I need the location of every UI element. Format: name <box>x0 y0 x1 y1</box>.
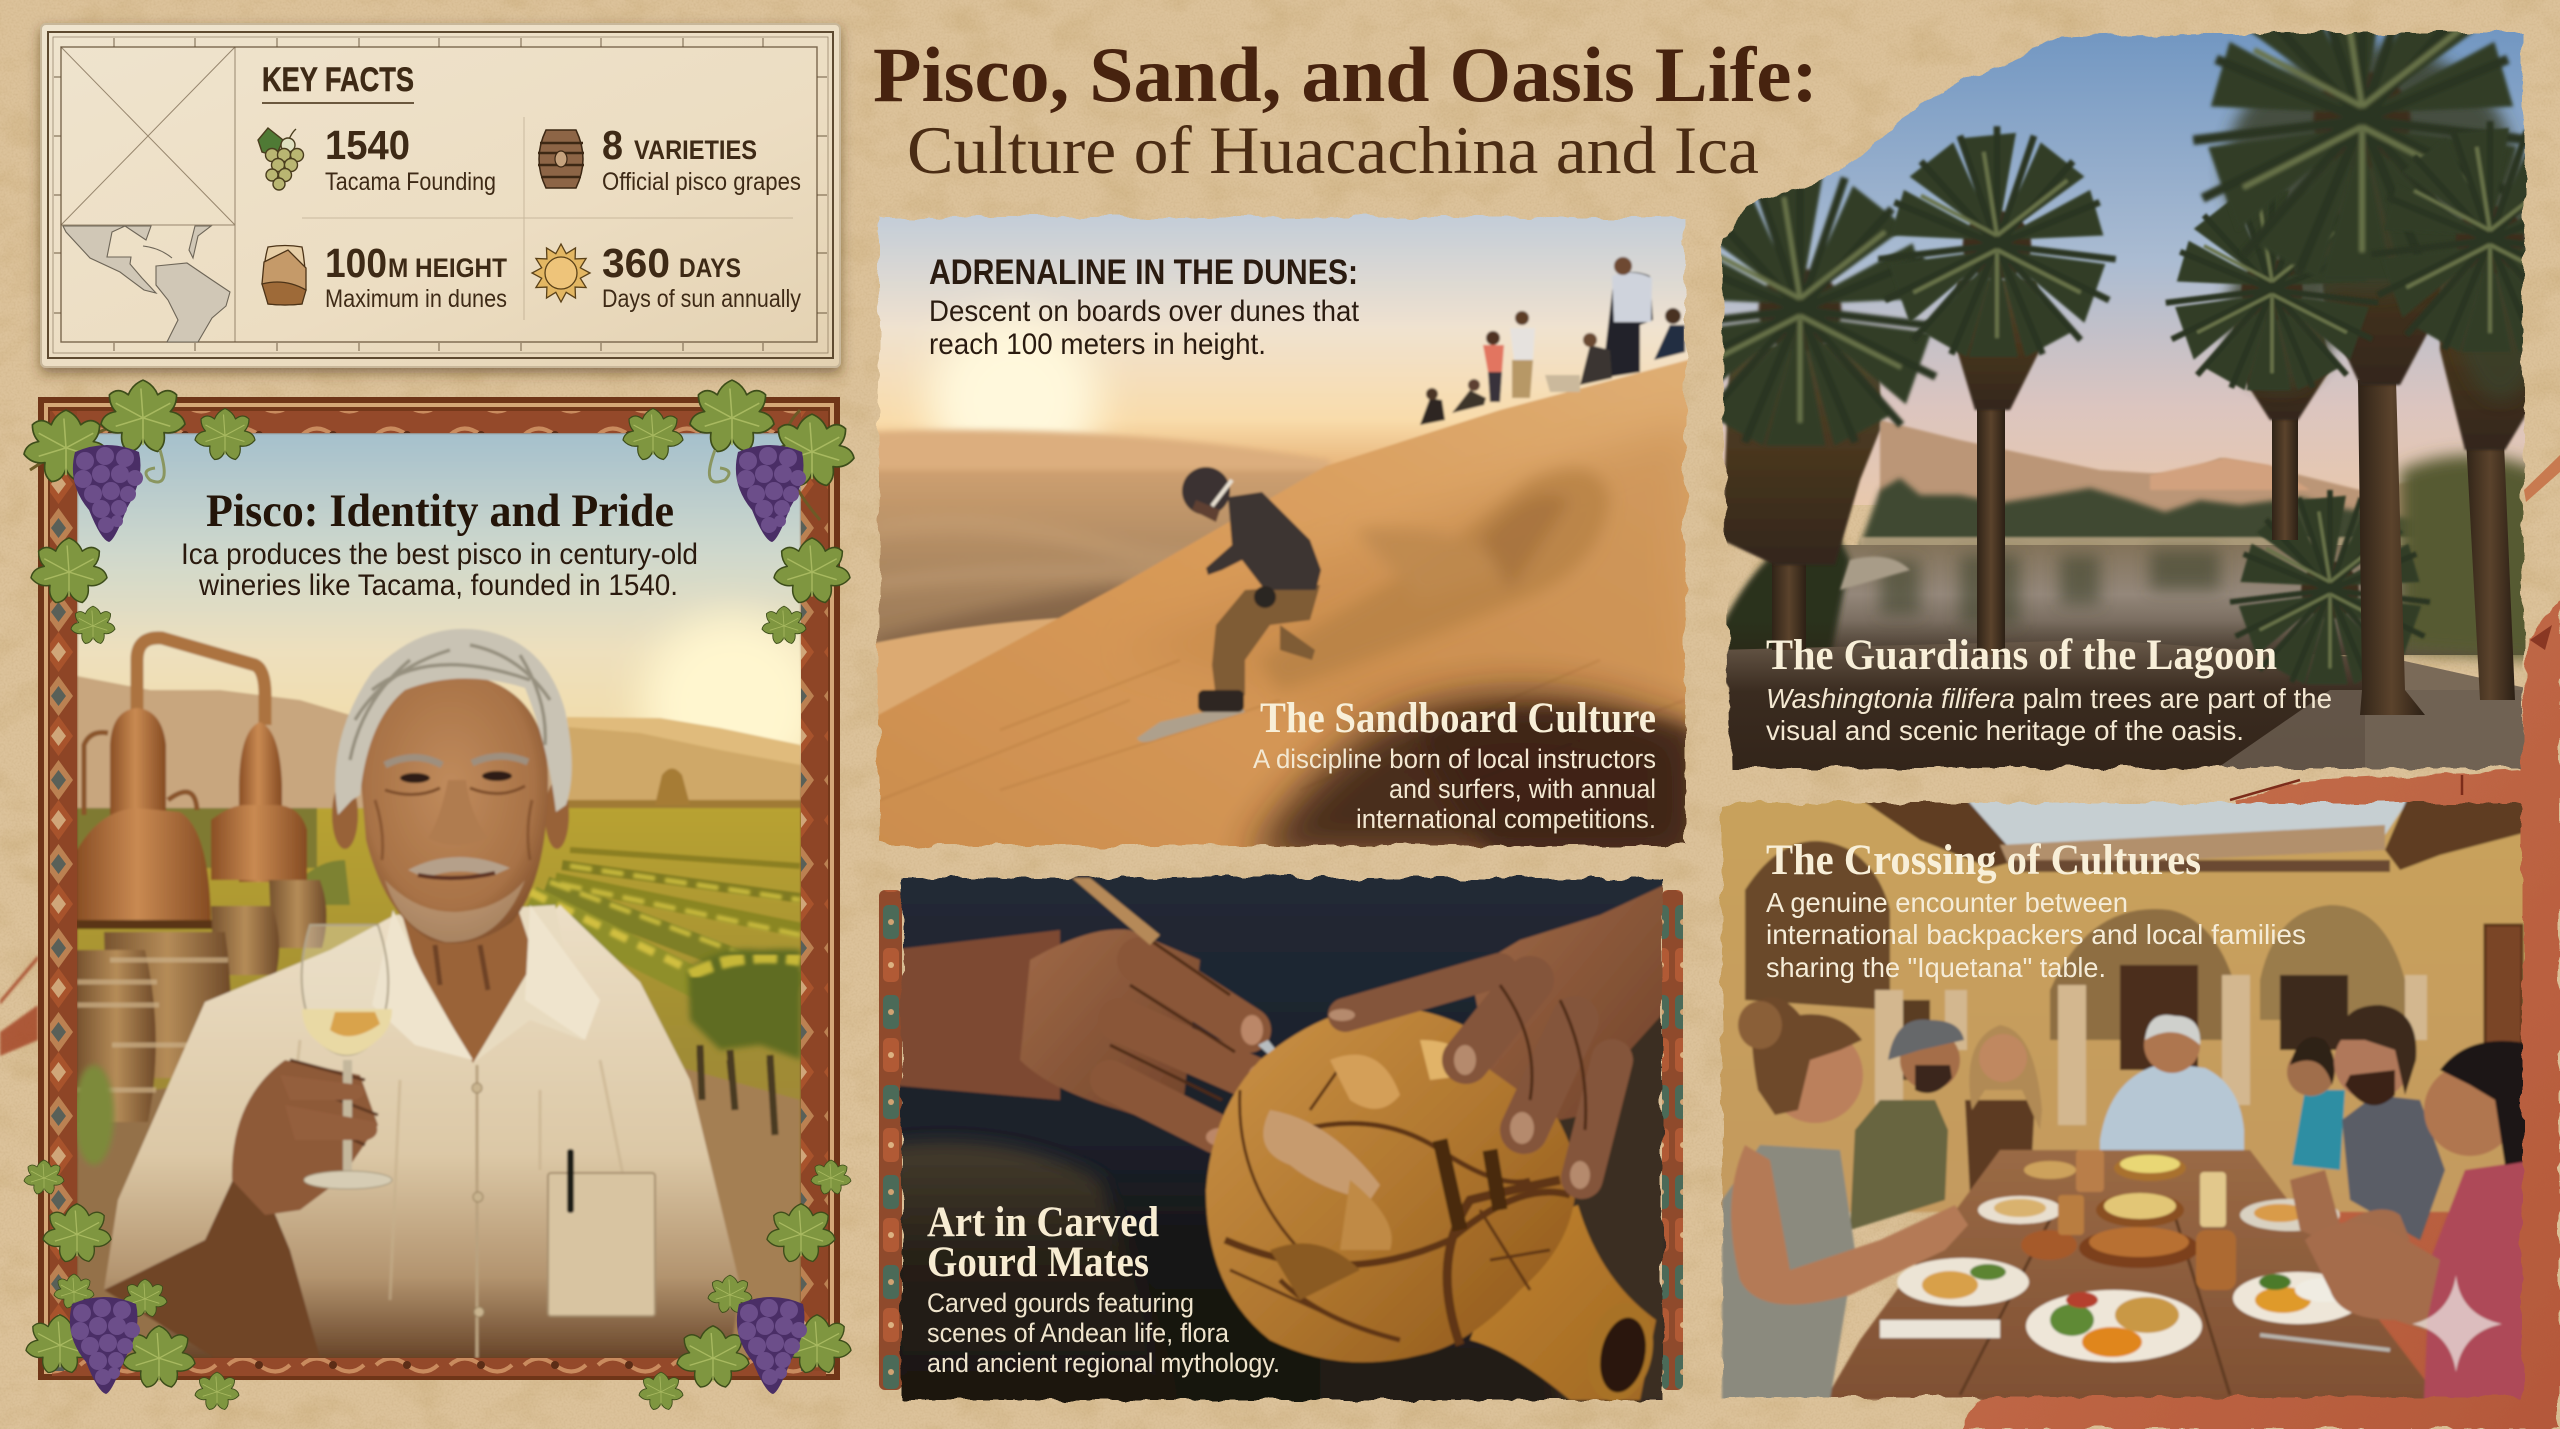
sand spray <box>1260 469 1610 690</box>
panel: pisco identity and pride <box>24 380 854 1410</box>
gourd neck <box>1470 1205 1656 1400</box>
text: crossing description: sharing the "Iquetana" table. <box>1766 952 2106 983</box>
text: lagoon description <box>1766 683 2332 746</box>
sky <box>876 214 1688 464</box>
dark shadow behind caption <box>1250 695 1695 860</box>
hand right <box>1470 880 1675 1120</box>
icon: barrel <box>538 130 584 188</box>
text: sandboard description: A discipline born of local instructors <box>1253 744 1656 774</box>
woman in tank top, left <box>1722 997 1968 1400</box>
caption fade <box>890 1160 1320 1410</box>
heading underline <box>262 102 414 104</box>
hand left <box>1020 929 1200 1130</box>
dense foliage mass, upper right <box>2225 45 2550 400</box>
heading: art in carved gourd mates <box>927 1199 1159 1286</box>
stat: 8 varieties <box>602 122 801 196</box>
panel: crossing of cultures <box>1710 790 2535 1400</box>
gourd carvings <box>1225 1060 1570 1345</box>
copper stills <box>77 638 307 929</box>
text: adrenaline description <box>929 295 1360 361</box>
mini map: Americas <box>63 226 230 342</box>
background: red earth torn paper, lower right <box>1960 455 2560 1429</box>
right arches <box>2260 905 2405 1020</box>
panel: sandboard culture <box>865 205 1695 860</box>
man: face <box>360 672 548 943</box>
dune hills <box>1880 420 2420 560</box>
photo: gourd carving <box>890 868 1675 1410</box>
text: pisco description: wineries like Tacama, founded in 1540. <box>198 569 678 602</box>
stat: 100m height: 100 <box>325 240 387 286</box>
man with cap and green shirt <box>1850 1020 1964 1230</box>
stat: 100m height: Maximum in dunes <box>325 285 507 313</box>
text: sandboard description <box>1253 744 1656 834</box>
title line 2: Culture of Huacachina and Ica <box>907 112 1759 188</box>
text: sandboard description: and surfers, with annual <box>1389 774 1656 804</box>
rider <box>1137 467 1321 742</box>
palm trunks <box>1772 380 2515 715</box>
far desert <box>876 466 1318 644</box>
big dune <box>865 358 1695 860</box>
far trees <box>1860 478 2420 555</box>
dark shirt background <box>890 868 1675 1408</box>
text: gourd description <box>927 1288 1280 1378</box>
text: lagoon description: visual and scenic heritage of the oasis. <box>1766 715 2244 746</box>
roof eaves <box>1850 792 2535 870</box>
text: crossing description: A genuine encounter between <box>1766 887 2128 918</box>
photo: dune descent <box>865 205 1695 860</box>
sun <box>913 308 1115 436</box>
text: gourd description: Carved gourds featuring <box>927 1288 1194 1318</box>
photo: shared table in courtyard <box>1710 790 2535 1400</box>
caption fade <box>1715 620 2365 780</box>
card border rules <box>48 32 833 358</box>
title line 1: Pisco, Sand, and Oasis Life: <box>873 31 1818 118</box>
panel: key facts <box>41 24 840 367</box>
bush <box>74 1065 114 1165</box>
spectators on the crest <box>1420 257 1685 425</box>
fingers over stem <box>280 1075 377 1140</box>
card base <box>41 24 840 367</box>
stat: 360 days: Days of sun annually <box>602 285 801 313</box>
photo: palms and lagoon <box>1656 0 2560 780</box>
heading: the crossing of cultures: The Crossing of Cultures <box>1766 837 2201 884</box>
sky <box>77 433 801 833</box>
shore bushes left <box>1715 520 1850 660</box>
vineyard ground <box>77 808 801 1358</box>
man: hair <box>335 629 572 815</box>
ornate frame <box>38 397 840 1380</box>
right bank foliage <box>2400 455 2540 660</box>
text: crossing description: international backpackers and local families <box>1766 919 2306 950</box>
fingers left <box>1110 960 1252 1134</box>
lagoon <box>1780 545 2540 655</box>
text: gourd description: and ancient regional mythology. <box>927 1348 1280 1378</box>
icon: sun <box>532 244 590 302</box>
vine rows <box>530 850 800 1135</box>
text: lagoon description: Washingtonia filifera palm trees are part of the <box>1766 683 2332 714</box>
stat: 100m height: M HEIGHT <box>388 253 507 283</box>
text: pisco description: Ica produces the best pisco in century-old <box>181 538 698 571</box>
heading: the guardians of the lagoon: The Guardians of the Lagoon <box>1766 632 2277 679</box>
text: sandboard description: international competitions. <box>1356 804 1656 834</box>
dune shading <box>1194 431 1690 718</box>
stat: 1540 <box>325 122 496 196</box>
title block <box>873 31 1818 188</box>
heading: art in carved gourd mates: Art in Carved <box>927 1199 1159 1246</box>
elder man <box>2100 1015 2244 1150</box>
small foreground palm <box>2230 490 2430 684</box>
woman with teal top <box>2287 1037 2345 1170</box>
man: shirt and body <box>104 890 740 1358</box>
stat: 100m height <box>325 240 507 313</box>
heading: art in carved gourd mates: Gourd Mates <box>927 1239 1149 1286</box>
man: facial features <box>375 756 532 878</box>
stat: 1540: 1540 <box>325 122 410 168</box>
background: red stain, left edge <box>0 955 38 1056</box>
near vine block <box>688 949 801 1060</box>
stat: 360 days <box>602 240 801 313</box>
text: crossing description <box>1766 887 2306 983</box>
text: adrenaline description: Descent on boards over dunes that <box>929 295 1360 328</box>
near left dune <box>876 617 1058 715</box>
icon: dune jar <box>262 246 306 305</box>
sand foreground <box>1715 640 2535 780</box>
stat: 360 days: DAYS <box>679 253 741 283</box>
man: forearm and hand <box>104 1060 378 1358</box>
icon: grapes <box>258 128 304 190</box>
heading: adrenaline in the dunes: ADRENALINE IN THE DUNES: <box>929 253 1358 292</box>
fingers right <box>1345 970 1612 1178</box>
distant hills <box>77 676 800 830</box>
stat: 1540: Tacama Founding <box>325 168 496 196</box>
left ground <box>77 1080 230 1358</box>
carving tool <box>1072 878 1160 945</box>
sun glow <box>643 615 823 795</box>
man with curly hair and gray shirt <box>2290 1005 2445 1260</box>
sky opening <box>1960 790 2415 850</box>
sparkle mark <box>2412 1275 2502 1372</box>
text: pisco description <box>181 538 698 602</box>
man: ears <box>332 781 569 849</box>
text: adrenaline description: reach 100 meters in height. <box>929 328 1266 361</box>
stat: 8 varieties: VARIETIES <box>634 135 757 165</box>
text: gourd description: scenes of Andean life, flora <box>927 1318 1230 1348</box>
stat: 8 varieties: 8 <box>602 122 623 168</box>
woman in pink shirt, right <box>2305 1041 2535 1400</box>
heading: the sandboard culture: The Sandboard Culture <box>1260 695 1656 742</box>
palm skirts <box>1722 140 2535 565</box>
oak barrels <box>77 880 327 1122</box>
vine leaves and grapes <box>24 380 854 1410</box>
stat: 8 varieties: Official pisco grapes <box>602 168 801 196</box>
man: stubble <box>385 880 525 942</box>
heading: key facts: KEY FACTS <box>262 61 414 99</box>
plates and dishes <box>1880 1150 2390 1362</box>
photo: vintner with glass <box>77 433 801 1358</box>
panel: carved gourd mates <box>879 868 1683 1410</box>
left arch <box>1745 841 1890 1010</box>
sky <box>1705 20 2540 505</box>
table <box>1825 1150 2440 1400</box>
columns <box>1875 975 2427 1125</box>
heading: pisco identity and pride: Pisco: Identity and Pride <box>206 485 674 537</box>
panel: guardians of the lagoon <box>1656 0 2560 780</box>
blonde woman <box>1965 1025 2042 1195</box>
side pattern strips <box>879 890 1683 1390</box>
palm crowns <box>1656 166 1944 446</box>
gourd body <box>1206 1005 1576 1362</box>
stat: 360 days: 360 <box>602 240 670 286</box>
wine glass <box>302 925 392 1189</box>
courtyard wall <box>1710 792 2535 1212</box>
arm left <box>890 930 1060 1100</box>
